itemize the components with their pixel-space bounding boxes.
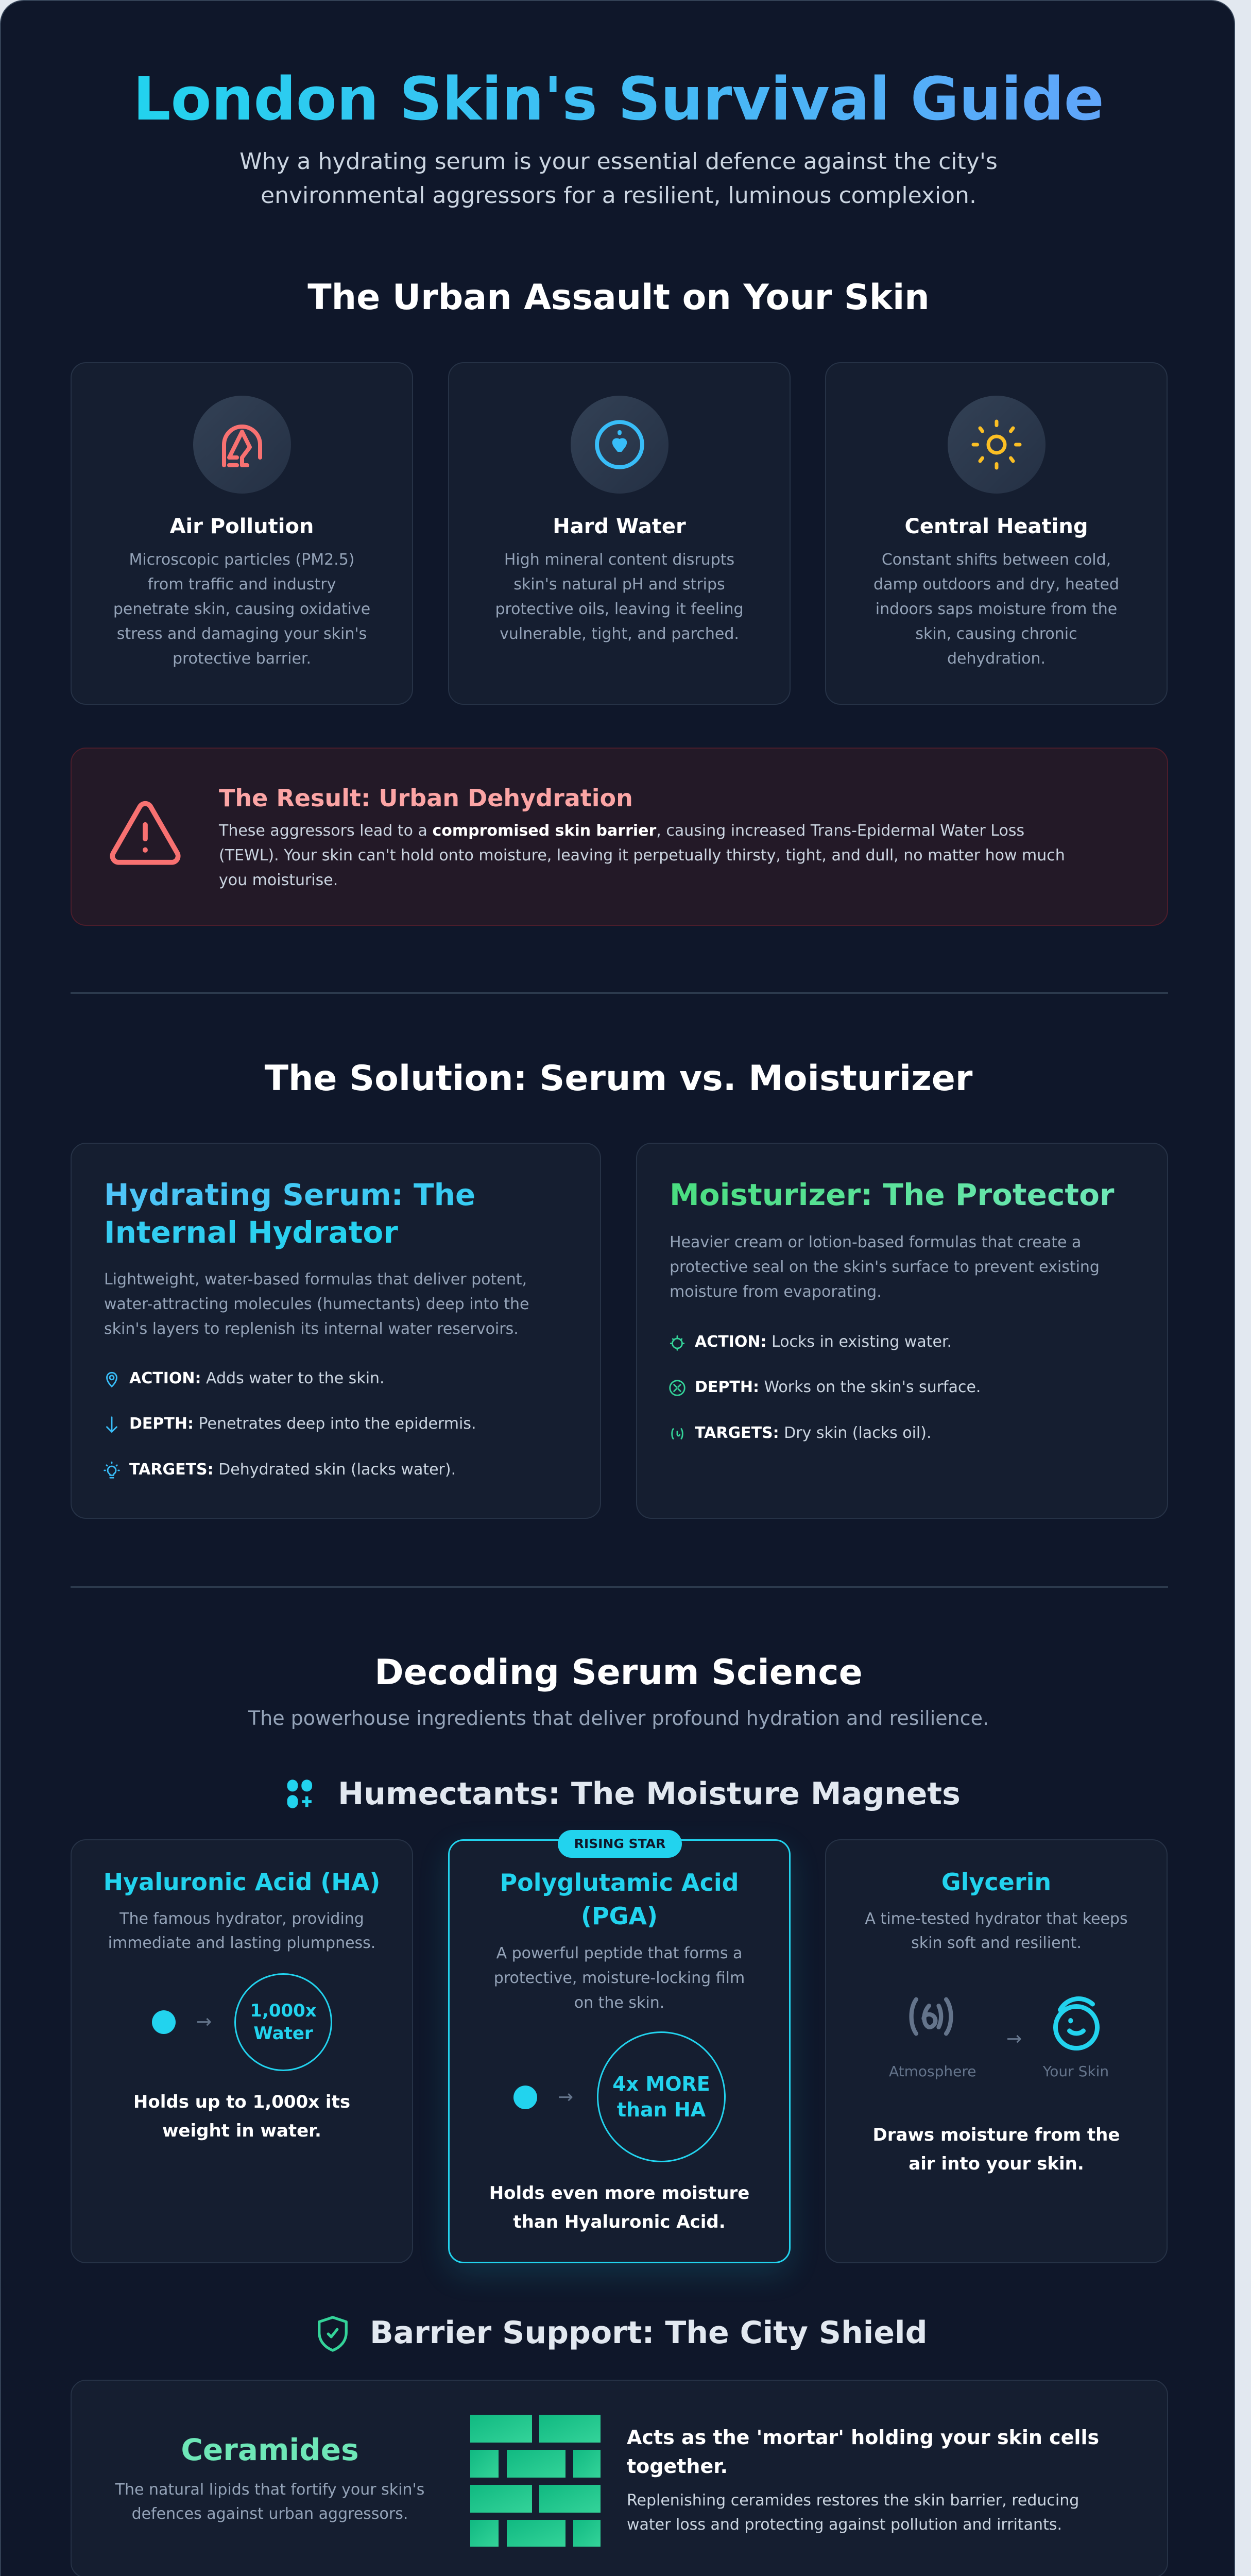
card text: dehydration. — [947, 650, 1046, 668]
diagram: PGA: → — [558, 2087, 573, 2108]
heading: solution: The Solution: Serum vs. Moisturizer — [265, 1058, 972, 1099]
glycerin text: skin soft and resilient. — [911, 1934, 1082, 1952]
subtitle — [239, 148, 998, 209]
PGA fact: Holds even more moisture — [489, 2183, 749, 2204]
HA text: The famous hydrator, providing — [119, 1910, 364, 1928]
PGA text — [450, 1941, 789, 2015]
serum title — [104, 1177, 475, 1250]
diagram: atmosphere to skin: Atmosphere — [889, 2063, 976, 2080]
HA fact: weight in water. — [162, 2121, 321, 2141]
PGA title: Polyglutamic Acid — [500, 1869, 739, 1896]
ceramides body text: water loss and protecting against pollution and irritants. — [627, 2516, 1062, 2534]
PGA text: A powerful peptide that forms a — [496, 1944, 742, 1962]
PGA text: on the skin. — [574, 1994, 664, 2012]
card text: skin's natural pH and strips — [513, 575, 725, 594]
icon: water — [571, 396, 669, 494]
diagram: PGA — [510, 2031, 727, 2163]
ceramides body text — [627, 2488, 1079, 2537]
heading: humectants: Humectants: The Moisture Magnets — [338, 1776, 961, 1812]
panel: moisturizer — [636, 1143, 1168, 1519]
panel: air pollution — [71, 362, 413, 705]
panel: hard water — [448, 362, 791, 705]
panel: hydrating serum: ACTION: Adds water to the skin. — [129, 1369, 385, 1387]
card text — [495, 551, 744, 643]
card text: damp outdoors and dry, heated — [873, 575, 1119, 594]
panel: hydrating serum: TARGETS: Dehydrated skin (lacks water). — [129, 1461, 456, 1479]
card text: protective barrier. — [173, 650, 311, 668]
card text: Microscopic particles (PM2.5) — [129, 551, 355, 569]
diagram: PGA: 4x MORE — [612, 2073, 710, 2095]
card text — [113, 551, 370, 668]
list item: depth — [669, 1378, 981, 1396]
glycerin text: A time-tested hydrator that keeps — [865, 1910, 1128, 1928]
section subtitle: The powerhouse ingredients that deliver profound hydration and resilience. — [248, 1707, 989, 1730]
card text: stress and damaging your skin's — [117, 625, 367, 643]
ceramides heading text: Acts as the 'mortar' holding your skin cells — [627, 2426, 1099, 2449]
panel: ceramides — [71, 2380, 1168, 2576]
heading: urban assault: The Urban Assault on Your Skin — [307, 277, 930, 318]
moisturizer text: Heavier cream or lotion-based formulas that create a — [670, 1233, 1081, 1251]
moisturizer text: moisture from evaporating. — [670, 1283, 882, 1301]
icon: warning — [110, 801, 181, 865]
list item: action — [106, 1369, 385, 1387]
callout text: These aggressors lead to a compromised skin barrier, causing increased Trans-Epidermal Water Loss — [219, 822, 1024, 840]
HA fact — [133, 2092, 350, 2141]
badge: rising star: RISING STAR — [574, 1836, 665, 1851]
card title: Air Pollution — [170, 515, 314, 538]
list item: targets — [104, 1461, 456, 1479]
ceramides title: Ceramides — [181, 2432, 359, 2467]
PGA title: (PGA) — [581, 1902, 658, 1930]
panel: polyglutamic acid — [448, 1839, 791, 2263]
icon: bricks — [470, 2415, 601, 2547]
serum text: skin's layers to replenish its internal water reservoirs. — [104, 1320, 519, 1338]
diagram: HA: 1,000x — [250, 2001, 317, 2021]
list item: depth — [106, 1415, 476, 1433]
card title: Hard Water — [553, 515, 686, 538]
PGA title — [450, 1866, 789, 1933]
glycerin fact: Draws moisture from the — [873, 2125, 1120, 2145]
ceramides heading text — [627, 2423, 1099, 2481]
diagram: HA: → — [196, 2011, 212, 2032]
icon: pollution — [193, 396, 291, 494]
ceramides text: The natural lipids that fortify your skin's — [115, 2481, 424, 2499]
subtitle: environmental aggressors for a resilient, luminous complexion. — [261, 182, 976, 209]
diagram: PGA: than HA — [617, 2098, 706, 2121]
card text: penetrate skin, causing oxidative — [113, 600, 370, 618]
card text: Constant shifts between cold, — [882, 551, 1111, 569]
card text: indoors saps moisture from the — [876, 600, 1117, 618]
callout title: The Result: Urban Dehydration — [219, 784, 633, 812]
icon: humectants — [287, 1780, 312, 1808]
serum title: Hydrating Serum: The — [104, 1177, 475, 1212]
diagram: atmosphere to skin: → — [1006, 2028, 1022, 2049]
icon: skin — [1049, 1992, 1104, 2054]
card text: vulnerable, tight, and parched. — [500, 625, 739, 643]
diagram: atmosphere to skin — [888, 1990, 1115, 2082]
card text: protective oils, leaving it feeling — [495, 600, 744, 618]
icon: sun — [948, 396, 1046, 494]
icon: atmosphere — [903, 1995, 959, 2038]
callout: urban dehydration — [71, 748, 1168, 926]
PGA fact — [450, 2179, 789, 2236]
list item: targets — [671, 1424, 932, 1442]
ceramides body text: Replenishing ceramides restores the skin barrier, reducing — [627, 2492, 1079, 2510]
HA text: immediate and lasting plumpness. — [108, 1934, 375, 1952]
icon: shield — [315, 2314, 351, 2353]
callout text: (TEWL). Your skin can't hold onto moisture, leaving it perpetually thirsty, tight, and dull, no matter how much — [219, 846, 1065, 865]
panel: moisturizer: DEPTH: Works on the skin's surface. — [695, 1378, 981, 1396]
diagram: HA — [152, 1973, 332, 2071]
callout text — [218, 822, 1065, 889]
ceramides heading text: together. — [627, 2455, 728, 2478]
ceramides text — [90, 2478, 450, 2526]
glycerin text — [826, 1907, 1167, 1955]
panel: glycerin — [825, 1839, 1168, 2263]
card text: High mineral content disrupts — [504, 551, 734, 569]
serum title: Internal Hydrator — [104, 1215, 398, 1250]
HA text — [108, 1910, 375, 1952]
card text: skin, causing chronic — [915, 625, 1077, 643]
card title: Central Heating — [904, 515, 1088, 538]
HA fact: Holds up to 1,000x its — [133, 2092, 350, 2112]
panel: hydrating serum: DEPTH: Penetrates deep into the epidermis. — [129, 1415, 476, 1433]
title: London Skin's Survival Guide — [133, 65, 1104, 134]
serum text: Lightweight, water-based formulas that deliver potent, — [104, 1270, 527, 1289]
card text — [873, 551, 1119, 668]
moisturizer text: protective seal on the skin's surface to prevent existing — [670, 1258, 1100, 1276]
panel: moisturizer: TARGETS: Dry skin (lacks oil). — [695, 1424, 932, 1442]
serum text — [104, 1270, 529, 1338]
glycerin title: Glycerin — [941, 1868, 1051, 1896]
card text: from traffic and industry — [148, 575, 336, 594]
badge: rising star — [558, 1830, 682, 1858]
list item: action — [670, 1333, 952, 1351]
panel: hyaluronic acid — [71, 1839, 413, 2263]
diagram: HA: Water — [253, 2023, 313, 2044]
diagram: atmosphere to skin: Your Skin — [1043, 2063, 1109, 2080]
panel: moisturizer: ACTION: Locks in existing water. — [695, 1333, 952, 1351]
callout text: you moisturise. — [219, 871, 338, 889]
panel: hydrating serum — [71, 1143, 601, 1519]
serum text: water-attracting molecules (humectants) deep into the — [104, 1295, 529, 1313]
HA title: Hyaluronic Acid (HA) — [104, 1868, 380, 1896]
moisturizer title: Moisturizer: The Protector — [670, 1177, 1115, 1212]
PGA fact: than Hyaluronic Acid. — [513, 2212, 726, 2232]
heading: decoding serum science: Decoding Serum Science — [374, 1652, 863, 1693]
ceramides text: defences against urban aggressors. — [132, 2505, 408, 2523]
subtitle: Why a hydrating serum is your essential defence against the city's — [239, 148, 998, 175]
PGA text: protective, moisture-locking film — [494, 1969, 745, 1987]
glycerin fact: air into your skin. — [909, 2154, 1084, 2174]
glycerin fact — [826, 2121, 1167, 2178]
heading: barrier support: Barrier Support: The City Shield — [370, 2315, 928, 2351]
panel: central heating — [825, 362, 1168, 705]
moisturizer text — [670, 1233, 1100, 1301]
